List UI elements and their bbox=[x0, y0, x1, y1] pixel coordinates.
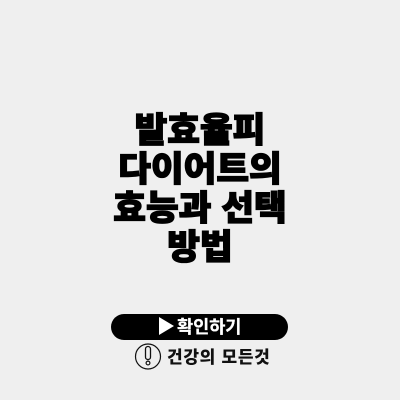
title bbox=[113, 102, 287, 269]
title: 효능과 선택 bbox=[113, 180, 287, 230]
icon: play triangle bbox=[159, 317, 174, 335]
caption: 건강의 모든것 bbox=[167, 343, 270, 368]
title: 다이어트의 bbox=[118, 141, 282, 191]
title: 발효율피 bbox=[135, 102, 265, 152]
title: 방법 bbox=[167, 219, 233, 269]
icon: exclamation circle bbox=[134, 343, 162, 370]
button: confirm bbox=[111, 314, 288, 340]
button label: 확인하기 bbox=[177, 314, 241, 339]
